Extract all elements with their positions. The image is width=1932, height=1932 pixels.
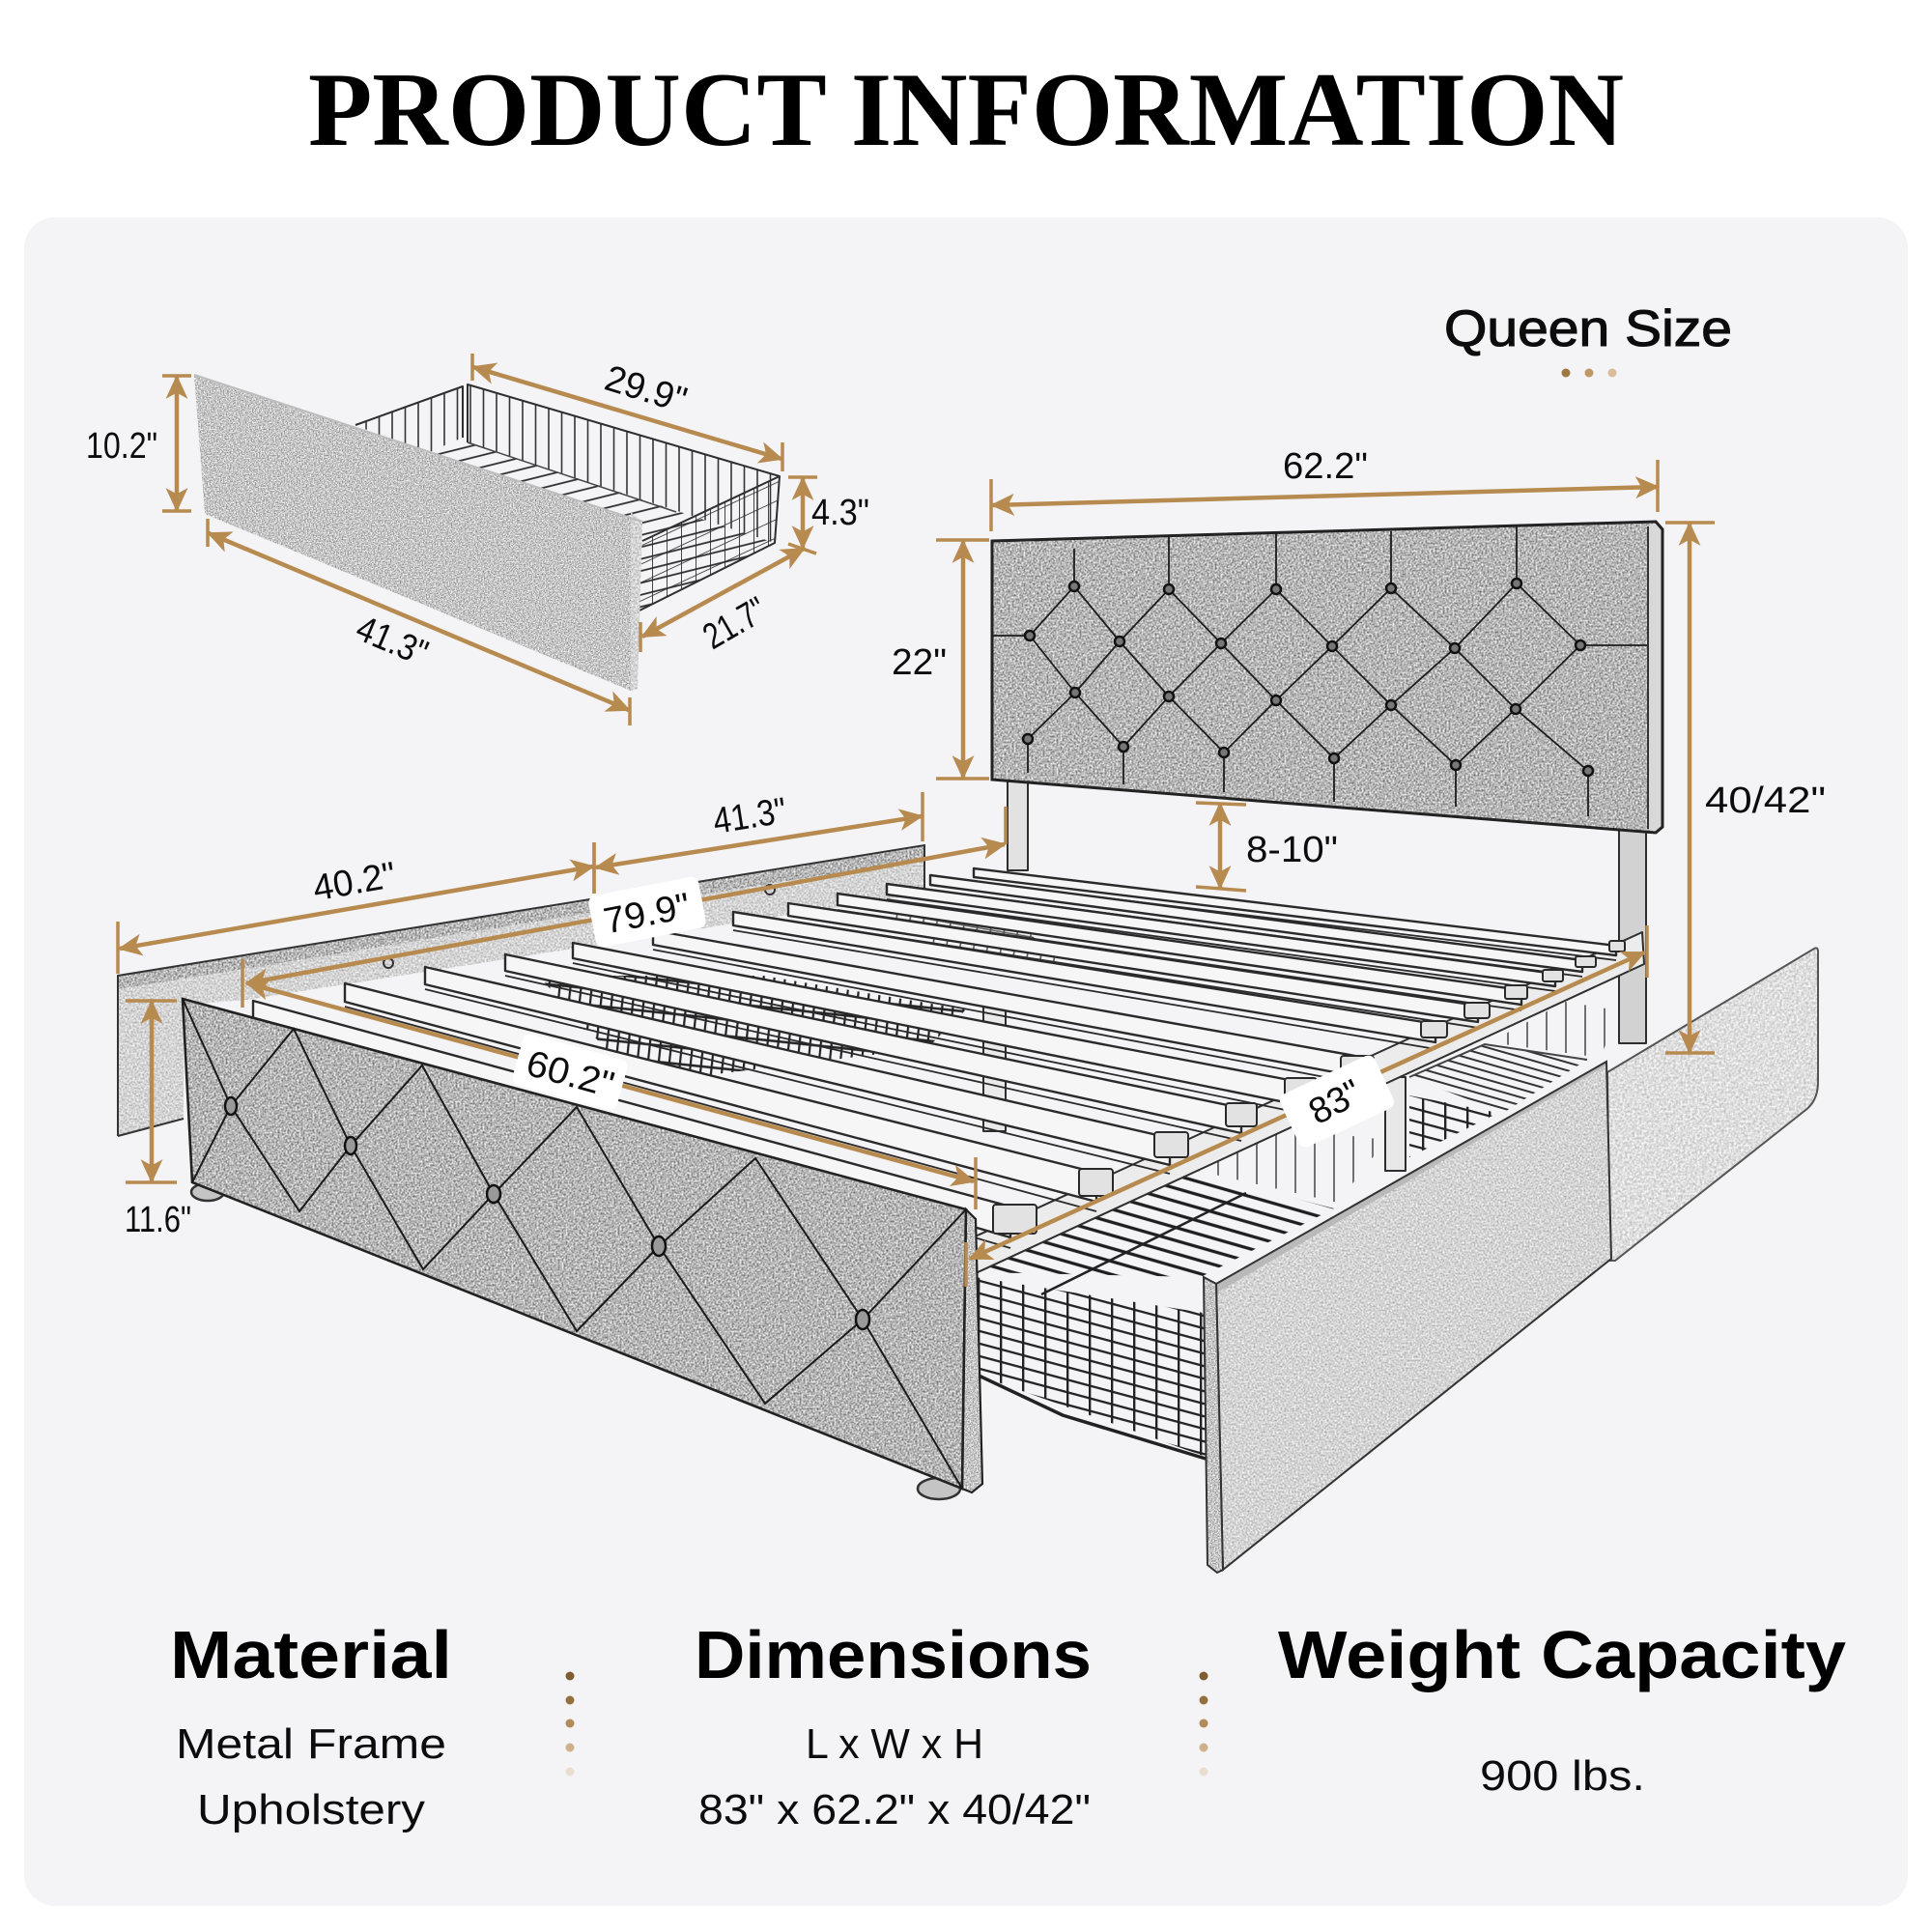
dimension: frame length 79.9: 79.9" bbox=[601, 886, 694, 942]
dimension lines: drawer bbox=[86, 354, 869, 725]
dimension: headboard height 22 bbox=[892, 540, 989, 779]
tufting buttons bbox=[1023, 579, 1593, 776]
dimension: drawer height 11.6: 11.6" bbox=[125, 1200, 191, 1240]
drawer wire basket bbox=[355, 384, 780, 611]
divider dots right bbox=[1200, 1671, 1208, 1776]
dimension lines: bed bbox=[118, 446, 1826, 1287]
tufting lines bbox=[992, 526, 1647, 816]
dimension: headboard height 22: 22" bbox=[892, 642, 947, 683]
dimension: basket depth 21.7 bbox=[640, 549, 804, 658]
column: weight capacity: 900 lbs. bbox=[1480, 1752, 1645, 1800]
dimension: drawer height 11.6 bbox=[125, 1001, 191, 1240]
right front drawer panel bbox=[1204, 1062, 1611, 1573]
dimension: basket length 29.9: 29.9" bbox=[600, 358, 692, 421]
column: weight capacity bbox=[1278, 1617, 1846, 1800]
dimension: basket depth 21.7: 21.7" bbox=[696, 589, 774, 658]
dimension: frame length 79.9 bbox=[242, 807, 1006, 1008]
column: dimensions: Dimensions bbox=[695, 1617, 1092, 1692]
front drawer panel bbox=[183, 999, 982, 1492]
dimension: frame width 60.2: 60.2" bbox=[522, 1043, 618, 1106]
dimension: total height 40/42 bbox=[1665, 523, 1826, 1053]
front post bbox=[1385, 1077, 1406, 1171]
rear right basket bbox=[1409, 1002, 1618, 1157]
drawer front panel bbox=[194, 375, 642, 691]
right side rail bbox=[971, 932, 1644, 1273]
back drawer panel left bbox=[118, 845, 924, 1136]
column: dimensions: L x W x H bbox=[806, 1720, 983, 1768]
column: material: Material bbox=[170, 1617, 452, 1692]
front drawer buttons bbox=[225, 1097, 869, 1329]
dimension: side 40.2 bbox=[118, 842, 594, 974]
dimension: side 41.3: 41.3" bbox=[710, 790, 789, 842]
right rear drawer front bbox=[1607, 948, 1818, 1261]
dimension: basket height 4.3 bbox=[788, 477, 869, 554]
dimension: drawer length 41.3: 41.3" bbox=[351, 609, 434, 674]
under-slat wire clutter bbox=[538, 913, 1063, 1079]
column: weight capacity: Weight Capacity bbox=[1278, 1617, 1846, 1692]
dimension: frame width 60.2 bbox=[247, 983, 976, 1209]
dots under queen size bbox=[1561, 369, 1617, 377]
illustration: storage drawer bbox=[194, 375, 780, 691]
heading: queen size: Queen Size bbox=[1444, 300, 1732, 357]
centre support post bbox=[983, 1000, 1006, 1131]
slat end caps bbox=[993, 941, 1625, 1234]
dimension: basket length 29.9 bbox=[472, 354, 782, 471]
dimension: total height 40/42: 40/42" bbox=[1705, 781, 1826, 821]
dimension: side 41.3 bbox=[594, 790, 923, 894]
dimension: total length 83: 83" bbox=[1302, 1072, 1369, 1133]
headboard bbox=[992, 522, 1662, 833]
column: material bbox=[170, 1617, 452, 1833]
dimension: clearance 8-10 bbox=[1196, 803, 1338, 891]
illustration: bed frame bbox=[118, 522, 1818, 1573]
front right basket bbox=[975, 1128, 1386, 1459]
title: PRODUCT INFORMATION bbox=[308, 51, 1624, 168]
dimension: drawer height 10.2: 10.2" bbox=[86, 426, 157, 467]
column: dimensions: 83" x 62.2" x 40/42" bbox=[698, 1786, 1091, 1833]
dimension: total length 83 bbox=[966, 925, 1647, 1287]
front drawer feet bbox=[191, 1183, 960, 1499]
dimension: clearance 8-10: 8-10" bbox=[1246, 830, 1338, 870]
dimension: headboard width 62.2 bbox=[991, 446, 1658, 531]
headboard posts bbox=[1008, 779, 1646, 1043]
dimension: drawer length 41.3 bbox=[208, 519, 630, 725]
dimension: basket height 4.3: 4.3" bbox=[811, 493, 869, 533]
column: material: Upholstery bbox=[197, 1786, 425, 1833]
column: material: Metal Frame bbox=[176, 1720, 446, 1768]
divider dots left bbox=[566, 1671, 574, 1776]
front drawer tufting lines bbox=[183, 999, 966, 1489]
dimension: headboard width 62.2: 62.2" bbox=[1283, 446, 1368, 487]
column: dimensions bbox=[695, 1617, 1092, 1833]
dimension: side 40.2: 40.2" bbox=[310, 855, 399, 909]
bed slats bbox=[253, 868, 1616, 1248]
dimension: drawer height 10.2 bbox=[86, 376, 191, 511]
